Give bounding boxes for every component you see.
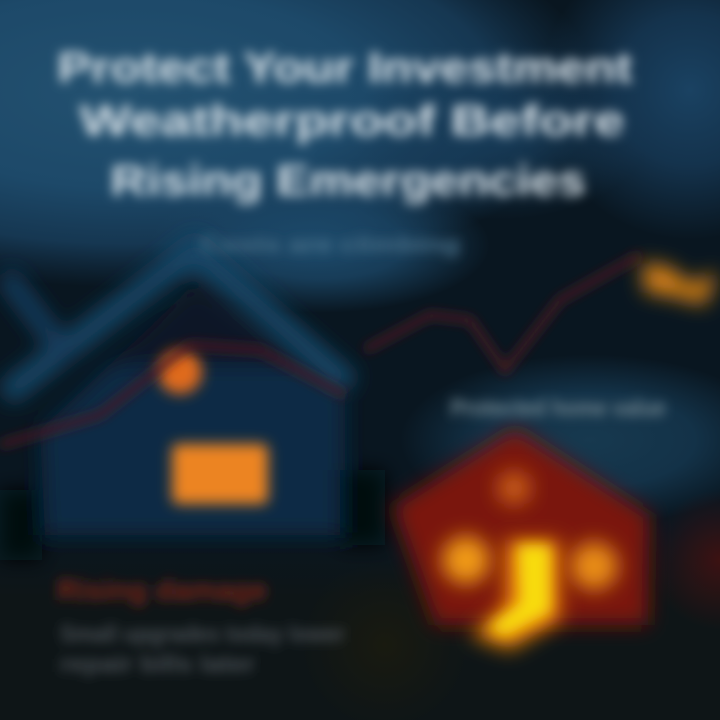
title: Protect Your Investment <box>58 44 632 92</box>
icon: red house left window <box>442 536 490 584</box>
house: left blue house <box>0 250 385 560</box>
chart label: Protected home value <box>450 395 666 422</box>
line chart: red trend line <box>0 255 640 445</box>
icon: arrow head glow <box>642 262 718 305</box>
house: right red house <box>392 428 650 650</box>
subtitle: Costs are climbing <box>200 232 460 257</box>
title: Weatherproof Before <box>80 97 624 145</box>
title: Rising Emergencies <box>110 157 586 205</box>
icon: round attic window <box>158 350 202 394</box>
icon: red house right window <box>570 542 618 590</box>
title <box>58 44 632 205</box>
icon: glowing window <box>172 444 268 504</box>
caption text <box>60 621 345 678</box>
caption line 2: repair bills later <box>60 651 255 678</box>
red heading: Rising damage <box>57 574 267 607</box>
caption line 1: Small upgrades today lower <box>60 621 345 648</box>
icon: door glow <box>470 540 560 650</box>
icon: red house attic light <box>497 471 531 505</box>
icon: red house glowing door <box>488 545 550 636</box>
